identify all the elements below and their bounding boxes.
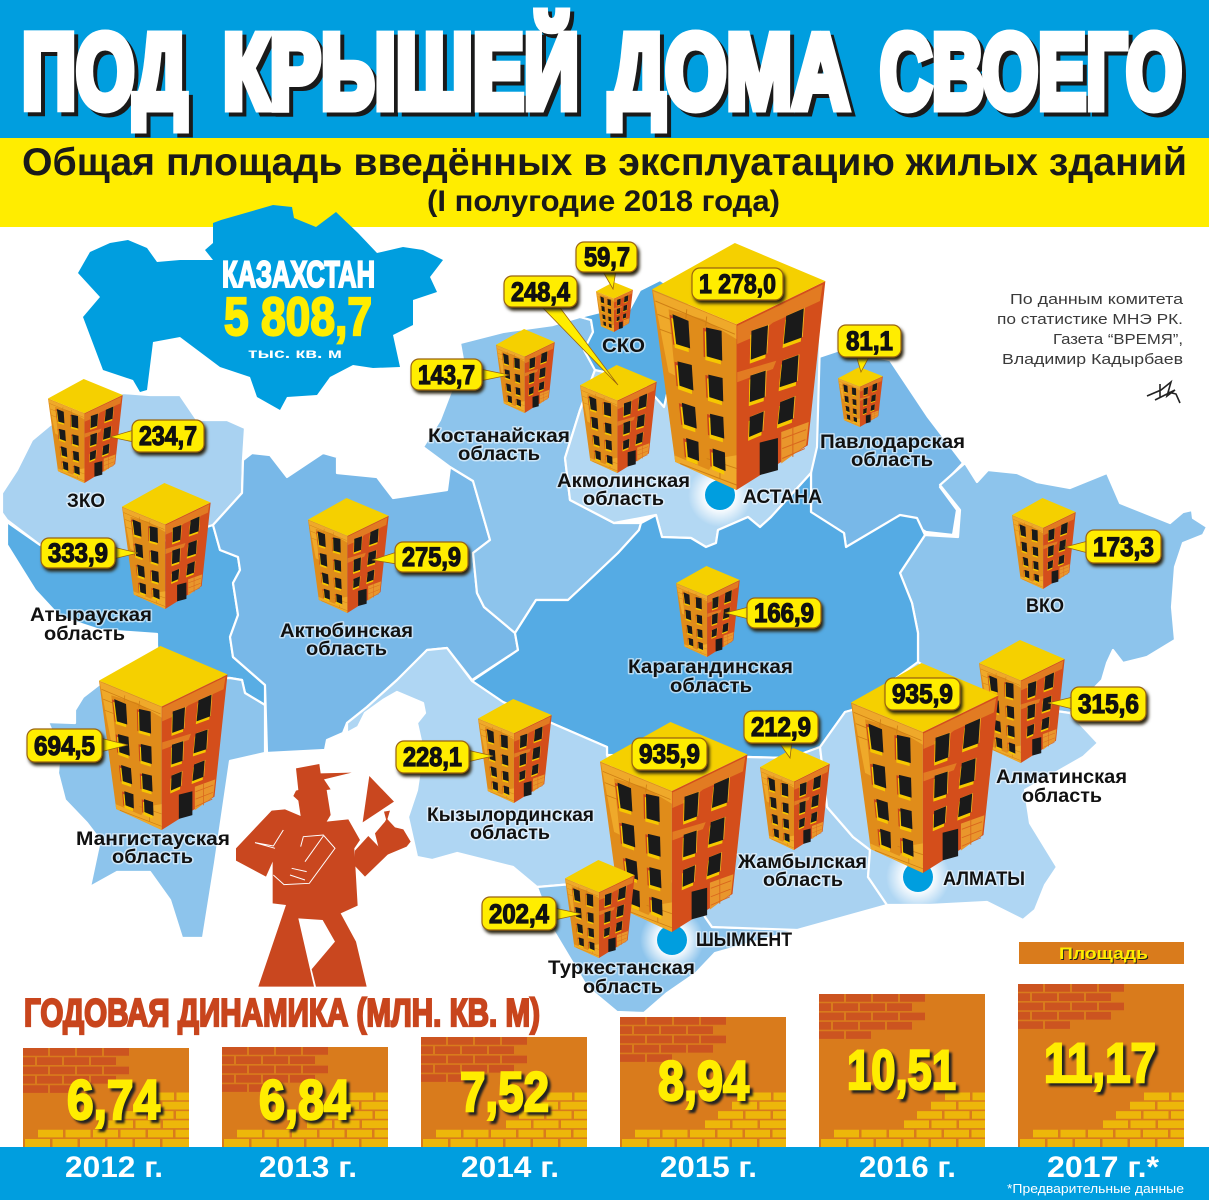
value: Алматы: 935,9	[892, 679, 953, 709]
year: 2014: 2014 г.	[461, 1151, 559, 1184]
region: Алматинская	[820, 662, 1098, 920]
label: Актюбинская область	[280, 621, 413, 660]
label: Атырауская область: область	[44, 624, 125, 645]
value: Павлодарская: 81,1	[846, 326, 893, 356]
building: Акмолинская	[504, 276, 657, 473]
small map of Kazakhstan with total	[78, 205, 443, 410]
title: КРЫШЕЙ	[227, 16, 583, 135]
building: Карагандинская	[676, 566, 821, 657]
year: 2016: 2016 г.	[859, 1151, 956, 1184]
value: Астана: 1 278,0	[699, 269, 776, 299]
label: Карагандинская область: область	[670, 676, 752, 697]
building: Атырауская	[41, 483, 211, 609]
value: Атырауская	[41, 538, 138, 568]
label: Кызылординская область: область	[470, 823, 550, 844]
source credits: по статистике МНЭ РК.	[997, 311, 1183, 328]
value: Акмолинская	[504, 276, 618, 385]
value: Мангистауская	[27, 729, 128, 762]
label: Алматинская область: область	[1022, 786, 1102, 807]
value: Шымкент: 935,9	[639, 739, 700, 769]
building: Кызылординская	[396, 699, 552, 803]
label: Акмолинская область	[557, 471, 690, 510]
bar: 2013	[222, 1047, 388, 1147]
bar: 2016	[819, 994, 985, 1147]
year: 2015: 2015 г.	[660, 1151, 757, 1184]
label: ВКО: ВКО	[1026, 596, 1064, 617]
building: Астана	[652, 243, 825, 490]
label: Павлодарская область: область	[851, 450, 933, 471]
title: ДОМА	[613, 17, 853, 135]
bottom blue band	[0, 1147, 1209, 1200]
value: Алматинская	[1048, 687, 1146, 721]
value: ВКО: 173,3	[1093, 532, 1154, 562]
bar: 2016: 10,51	[847, 1038, 956, 1101]
legend: area	[1019, 942, 1184, 964]
bar: 2012: 6,74	[67, 1068, 160, 1131]
value: Костанайская	[411, 359, 509, 390]
building: Туркестанская	[482, 860, 635, 958]
label: Кызылординская область	[427, 805, 594, 844]
label: Мангистауская область: Мангистауская	[76, 829, 230, 850]
value: Алматинская: 315,6	[1078, 689, 1139, 719]
year: 2013: 2013 г.	[259, 1151, 357, 1184]
value: СКО: 59,7	[584, 242, 630, 272]
title: КРЫШЕЙ	[223, 12, 579, 131]
footnote: *Предварительные данные	[1007, 1181, 1184, 1196]
bar: 2014	[421, 1037, 587, 1147]
building: Костанайская	[411, 329, 555, 413]
region: Жамбылская	[607, 747, 887, 930]
source credits: По данным комитета	[1010, 291, 1184, 308]
label: Шымкент: ШЫМКЕНТ	[696, 930, 792, 951]
label: СКО: СКО	[602, 336, 645, 357]
building: Павлодарская	[838, 325, 901, 427]
city marker: Алматы	[886, 845, 950, 909]
value: ЗКО: 234,7	[139, 421, 197, 451]
label: Жамбылская область: область	[763, 870, 843, 891]
label: Акмолинская область: Акмолинская	[557, 471, 690, 492]
region: Костанайская	[423, 317, 641, 633]
total value: 5 808,7	[224, 287, 372, 347]
map of regions	[2, 280, 1207, 1013]
title	[22, 12, 1186, 135]
label: Павлодарская область: Павлодарская	[820, 432, 965, 453]
value: Карагандинская: 166,9	[754, 598, 814, 628]
label: Туркестанская область: область	[583, 977, 663, 998]
building: Мангистауская	[27, 646, 228, 830]
label: Актюбинская область: Актюбинская	[280, 621, 413, 642]
label: Карагандинская область: Карагандинская	[628, 657, 793, 678]
value: Костанайская: 143,7	[418, 360, 475, 390]
label: Атырауская область	[30, 605, 152, 645]
label: Астана: АСТАНА	[743, 487, 822, 508]
label: Туркестанская область	[548, 958, 695, 998]
label: Кызылординская область: Кызылординская	[427, 805, 594, 826]
region: Павлодарская	[808, 350, 963, 547]
title: ДОМА	[609, 13, 849, 131]
region: Кызылординская	[347, 648, 640, 887]
bar: 2015: 8,94	[658, 1049, 749, 1112]
label: Мангистауская область: область	[112, 847, 193, 868]
value: Жамбылская: 212,9	[751, 712, 811, 742]
bar: 2015	[620, 1017, 786, 1147]
source credits: Владимир Кадырбаев	[1002, 351, 1183, 368]
label: Мангистауская область	[76, 829, 230, 868]
building: Алматинская	[979, 640, 1146, 763]
building: Актюбинская	[308, 498, 468, 613]
label: Атырауская область: Атырауская	[30, 605, 152, 626]
city marker: Астана	[688, 463, 752, 527]
heading: annual dynamics: ГОДОВАЯ ДИНАМИКА (МЛН. КВ. М)	[24, 992, 540, 1035]
value: ЗКО	[110, 420, 204, 452]
bar: 2017	[1018, 984, 1184, 1147]
region: ЗКО	[2, 393, 245, 555]
building: СКО	[576, 242, 637, 332]
value: Кызылординская: 228,1	[403, 742, 462, 772]
unit: тыс. кв. м	[248, 345, 342, 361]
building: Шымкент	[600, 722, 747, 932]
value: Карагандинская	[725, 598, 821, 628]
region: Акмолинская	[565, 340, 820, 547]
label: Павлодарская область	[820, 432, 965, 471]
label: Костанайская область: область	[458, 444, 540, 465]
value: Кызылординская	[396, 741, 493, 773]
label: ЗКО: ЗКО	[67, 491, 105, 512]
region: Атырауская	[7, 522, 265, 705]
city marker: Шымкент	[640, 908, 704, 972]
label: Алматинская область: Алматинская	[996, 767, 1127, 788]
label: Костанайская область	[428, 426, 570, 465]
label: Алматы: АЛМАТЫ	[943, 869, 1025, 890]
label: Актюбинская область: область	[306, 639, 387, 660]
source credits: Газета “ВРЕМЯ”,	[1053, 331, 1183, 348]
label: Карагандинская область	[628, 657, 793, 697]
value: Туркестанская	[482, 897, 582, 930]
bar: 2012	[23, 1048, 189, 1147]
worker silhouette	[236, 764, 411, 987]
label: Костанайская область: Костанайская	[428, 426, 570, 447]
region: Туркестанская	[537, 860, 797, 1013]
region: Карагандинская	[472, 473, 925, 758]
label: Жамбылская область: Жамбылская	[737, 852, 867, 873]
bar: 2017: 11,17	[1044, 1031, 1156, 1094]
yellow subtitle band	[0, 138, 1209, 227]
value: Атырауская: 333,9	[48, 538, 108, 568]
legend: area: Площадь	[1059, 944, 1148, 963]
building: ВКО	[1012, 498, 1161, 589]
region: ВКО	[900, 463, 1207, 713]
value: Мангистауская: 694,5	[34, 731, 95, 761]
building: Алматы	[851, 663, 998, 873]
label: Алматинская область	[996, 767, 1127, 807]
title: ПОД	[26, 17, 191, 135]
label: Туркестанская область: Туркестанская	[548, 958, 695, 979]
top blue banner	[0, 0, 1209, 138]
building: ЗКО	[48, 379, 204, 483]
subtitle period: (I полугодие 2018 года)	[427, 185, 780, 218]
value: Туркестанская: 202,4	[489, 899, 549, 929]
subtitle: Общая площадь введённых в эксплуатацию жилых зданий	[22, 141, 1187, 184]
building: Жамбылская	[744, 711, 830, 850]
value: Акмолинская: 248,4	[511, 277, 570, 307]
signature	[1147, 382, 1180, 403]
region: Актюбинская	[213, 453, 518, 753]
country name: КАЗАХСТАН	[222, 254, 375, 295]
region: СКО	[580, 280, 690, 440]
label: Жамбылская область	[737, 852, 867, 891]
source credits	[997, 291, 1184, 368]
label: Акмолинская область: область	[583, 489, 664, 510]
value: Актюбинская	[372, 542, 468, 572]
year: 2012: 2012 г.	[65, 1151, 163, 1184]
year: 2017: 2017 г.*	[1047, 1151, 1159, 1184]
title: ПОД	[22, 13, 187, 131]
value: Актюбинская: 275,9	[402, 542, 461, 572]
value: ВКО	[1065, 530, 1161, 563]
bar: 2014: 7,52	[460, 1060, 549, 1123]
bar: 2013: 6,84	[259, 1068, 350, 1131]
region: Мангистауская	[48, 678, 265, 938]
